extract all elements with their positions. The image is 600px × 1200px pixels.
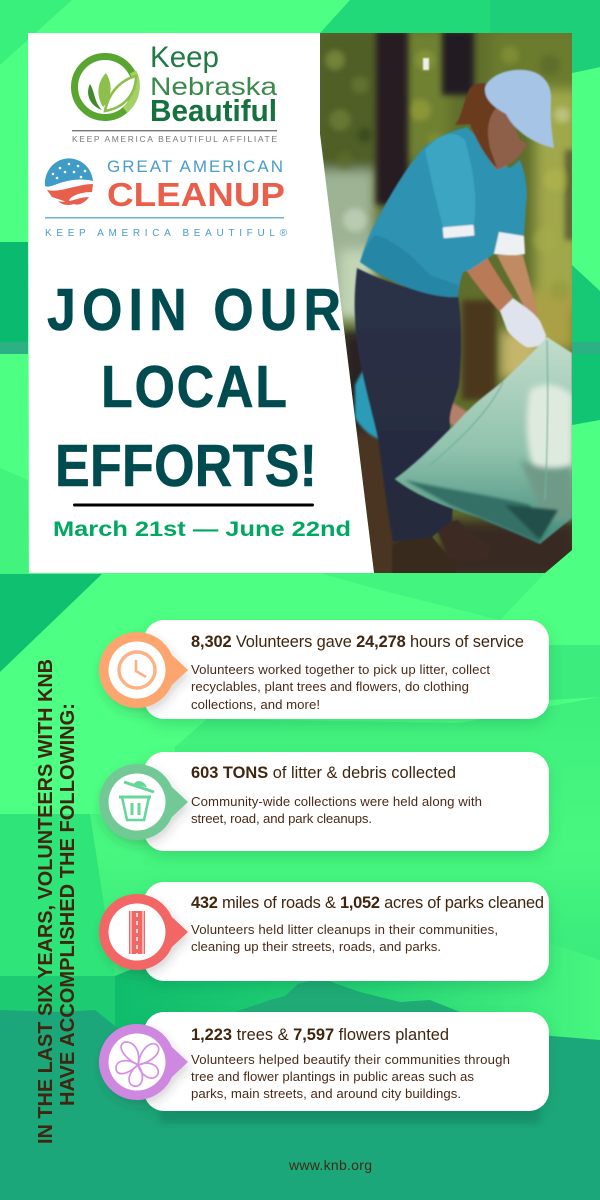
- card: volunteers: Volunteers worked together to pick up litter, collect: [191, 662, 490, 677]
- card: volunteers: [99, 620, 549, 719]
- photo: volunteer collecting litter in the woods: [315, 30, 580, 580]
- card: roads and parks: 432 miles of roads & 1,052 acres of parks cleaned: [191, 894, 544, 912]
- card: tons collected: street, road, and park cleanups.: [191, 811, 372, 826]
- card: volunteers: recyclables, plant trees and flowers, do clothing: [191, 679, 469, 694]
- card: tons collected: Community-wide collections were held along with: [191, 794, 482, 809]
- card: roads and parks: cleaning up their streets, roads, and parks.: [191, 939, 441, 954]
- vertical side heading: IN THE LAST SIX YEARS, VOLUNTEERS WITH KNB: [35, 659, 57, 1144]
- logo: Keep Nebraska Beautiful: [72, 41, 277, 144]
- card: trees and flowers: parks, main streets, and around city buildings.: [191, 1086, 461, 1101]
- title: Join Our Local Efforts!: EFFORTS!: [55, 432, 317, 499]
- title: Join Our Local Efforts!: [47, 276, 341, 499]
- logo: Great American Cleanup: GREAT AMERICAN: [107, 157, 283, 176]
- card: trees and flowers: [99, 1012, 549, 1111]
- card: roads and parks: Volunteers held litter cleanups in their communities,: [191, 922, 498, 937]
- vertical side heading: HAVE ACCOMPLISHED THE FOLLOWING:: [57, 703, 79, 1106]
- card: volunteers: 8,302 Volunteers gave 24,278 hours of service: [191, 633, 524, 651]
- card: roads and parks: [99, 882, 549, 981]
- icon: flower: [99, 1024, 188, 1100]
- title underline: [73, 504, 314, 506]
- date range: March 21st — June 22nd: [53, 518, 351, 541]
- card: tons collected: 603 TONS of litter & debris collected: [191, 764, 456, 782]
- logo: Keep Nebraska Beautiful: Nebraska: [150, 73, 277, 101]
- logo: Great American Cleanup: KEEP AMERICA BEAUTIFUL®: [45, 228, 288, 239]
- logo: Keep Nebraska Beautiful: Beautiful: [150, 93, 277, 128]
- card: tons collected: [99, 752, 549, 851]
- white title panel: [28, 33, 374, 573]
- logo: Keep Nebraska Beautiful: Keep: [150, 41, 219, 74]
- title: Join Our Local Efforts!: JOIN OUR: [47, 276, 341, 343]
- icon: trash can: [99, 764, 188, 840]
- website footer: www.knb.org: [288, 1157, 372, 1173]
- icon: clock: [99, 632, 188, 708]
- title: Join Our Local Efforts!: LOCAL: [101, 353, 287, 420]
- card: volunteers: collections, and more!: [191, 697, 320, 712]
- vertical side heading: [35, 659, 79, 1144]
- card: trees and flowers: 1,223 trees & 7,597 flowers planted: [191, 1026, 449, 1044]
- logo: Great American Cleanup: [45, 157, 288, 239]
- logo: Keep Nebraska Beautiful: KEEP AMERICA BEAUTIFUL AFFILIATE: [72, 134, 277, 144]
- card: trees and flowers: Volunteers helped beautify their communities through: [191, 1052, 510, 1067]
- card: trees and flowers: tree and flower plantings in public areas such as: [191, 1069, 474, 1084]
- boots: [392, 536, 454, 573]
- icon: road: [99, 894, 188, 970]
- logo: Great American Cleanup: CLEANUP: [107, 177, 285, 214]
